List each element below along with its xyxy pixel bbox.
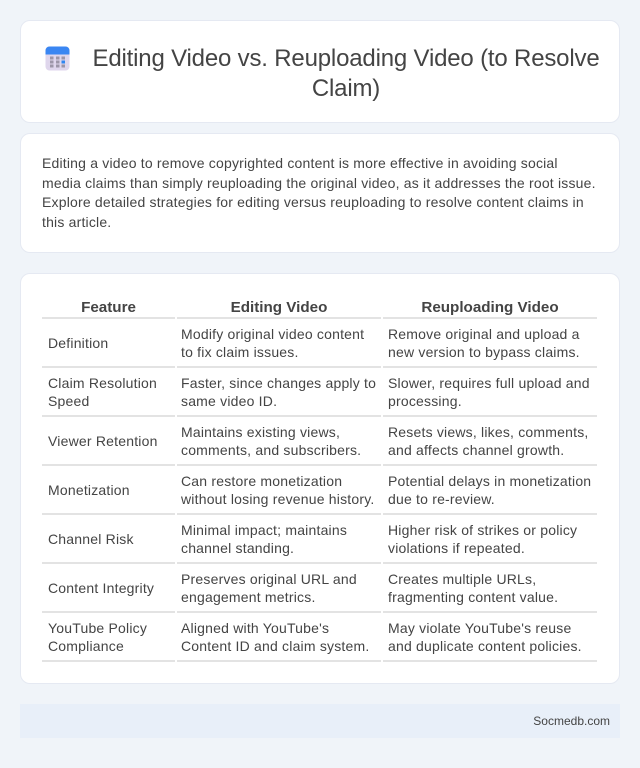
row: Definition: Remove original and upload a <box>388 326 580 342</box>
text block: intro paragraph: this article. <box>42 214 111 230</box>
text block: intro paragraph <box>42 155 596 230</box>
row: Definition: to fix claim issues. <box>181 344 299 360</box>
row: Monetization: Potential delays in monetization <box>388 473 591 489</box>
panel: title header <box>20 20 620 123</box>
row: YouTube Policy Compliance: YouTube Policy <box>48 620 147 636</box>
row: Monetization: without losing revenue history. <box>181 491 374 507</box>
row: Content Integrity: engagement metrics. <box>181 589 316 605</box>
text block: intro paragraph: Editing a video to remove copyrighted content is more effective in avoiding social <box>42 155 558 171</box>
row: YouTube Policy Compliance: May violate YouTube's reuse <box>388 620 571 636</box>
row: Channel Risk: violations if repeated. <box>388 540 525 556</box>
row: Content Integrity: Content Integrity <box>48 580 154 596</box>
row: Claim Resolution Speed: Claim Resolution <box>48 375 157 391</box>
table header: Reuploading Video <box>421 299 559 316</box>
title: Editing Video vs. Reuploading Video (to Resolve <box>92 45 600 72</box>
row: Definition: Modify original video content <box>181 326 364 342</box>
row: Monetization: Monetization <box>48 482 130 498</box>
row: Content Integrity: fragmenting content value. <box>388 589 558 605</box>
row: Claim Resolution Speed: Faster, since changes apply to <box>181 375 376 391</box>
title <box>92 45 600 102</box>
row: Viewer Retention: comments, and subscribers. <box>181 442 361 458</box>
row: Channel Risk: Minimal impact; maintains <box>181 522 347 538</box>
row: Channel Risk: channel standing. <box>181 540 294 556</box>
row: Claim Resolution Speed: processing. <box>388 393 462 409</box>
row: Definition: Definition <box>48 335 108 351</box>
row: Definition <box>48 326 580 360</box>
row: Viewer Retention: Maintains existing views, <box>181 424 340 440</box>
row: Channel Risk <box>48 522 577 556</box>
panel: intro <box>20 133 620 253</box>
row: Viewer Retention: Viewer Retention <box>48 433 158 449</box>
table header <box>81 299 559 316</box>
row: Viewer Retention: Resets views, likes, comments, <box>388 424 588 440</box>
footer bar <box>20 704 620 738</box>
row: Channel Risk: Higher risk of strikes or policy <box>388 522 577 538</box>
row: Monetization: due to re-review. <box>388 491 495 507</box>
text block: intro paragraph: media claims than simply reuploading the original video, as it addresses the root issue. <box>42 174 596 190</box>
row: Monetization <box>48 473 591 507</box>
row: Claim Resolution Speed: Speed <box>48 393 89 409</box>
row: YouTube Policy Compliance: Compliance <box>48 638 124 654</box>
text block: intro paragraph: Explore detailed strategies for editing versus reuploading to resolve content claims in <box>42 194 584 210</box>
footer source text: Socmedb.com <box>533 714 610 728</box>
row: YouTube Policy Compliance <box>48 620 582 654</box>
row: Channel Risk: Channel Risk <box>48 531 134 547</box>
row: Monetization: Can restore monetization <box>181 473 342 489</box>
row: Content Integrity: Preserves original URL and <box>181 571 357 587</box>
panel: comparison table <box>20 273 620 684</box>
row: Definition: new version to bypass claims. <box>388 344 580 360</box>
row: Content Integrity <box>48 571 558 605</box>
row: Claim Resolution Speed: same video ID. <box>181 393 277 409</box>
row: Viewer Retention <box>48 424 588 458</box>
title: Claim) <box>312 75 380 102</box>
row: Claim Resolution Speed <box>48 375 590 409</box>
table header: Editing Video <box>231 299 327 316</box>
row: Claim Resolution Speed: Slower, requires full upload and <box>388 375 590 391</box>
row: YouTube Policy Compliance: and duplicate content policies. <box>388 638 582 654</box>
row: YouTube Policy Compliance: Content ID and claim system. <box>181 638 369 654</box>
row: Viewer Retention: and affects channel growth. <box>388 442 564 458</box>
row: Content Integrity: Creates multiple URLs, <box>388 571 536 587</box>
table header: Feature <box>81 299 136 316</box>
row: YouTube Policy Compliance: Aligned with YouTube's <box>181 620 329 636</box>
icon: calendar grid <box>46 46 70 70</box>
